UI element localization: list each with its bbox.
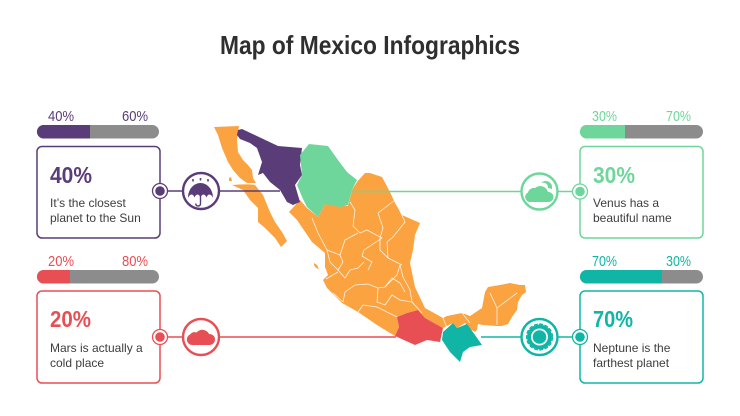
percent labels: 30% bbox=[592, 108, 617, 125]
connector line bbox=[481, 336, 573, 338]
connector dot bbox=[152, 330, 168, 344]
connector dot bbox=[572, 184, 588, 199]
description: Venus has a bbox=[593, 196, 659, 210]
percent labels: 20% bbox=[48, 253, 74, 270]
percent labels bbox=[592, 253, 691, 270]
percent labels bbox=[48, 253, 148, 270]
icon: gear bbox=[522, 319, 558, 355]
description: planet to the Sun bbox=[50, 211, 141, 225]
card bbox=[580, 291, 703, 383]
state borders bbox=[232, 184, 517, 328]
card bbox=[37, 146, 160, 238]
description: It’s the closest bbox=[50, 196, 126, 210]
region: Sonora bbox=[237, 129, 302, 205]
percent labels bbox=[592, 108, 691, 125]
region: Oaxaca bbox=[395, 310, 443, 345]
percent labels: 70% bbox=[592, 253, 617, 270]
panel: 70% teal bbox=[481, 253, 703, 383]
big number: 40% bbox=[50, 162, 92, 188]
progress bar bbox=[580, 125, 703, 138]
description: farthest planet bbox=[593, 356, 670, 370]
big number: 20% bbox=[50, 306, 91, 332]
description: Neptune is the bbox=[593, 341, 671, 355]
title: Map of Mexico Infographics bbox=[220, 30, 520, 60]
progress bar bbox=[37, 125, 159, 138]
icon: umbrella bbox=[183, 173, 219, 209]
connector dot bbox=[152, 184, 168, 198]
big number: 70% bbox=[593, 306, 633, 332]
progress bar bbox=[37, 270, 159, 284]
percent labels: 80% bbox=[122, 253, 148, 270]
panel: 20% red bbox=[37, 253, 396, 383]
panel: 40% purple bbox=[37, 108, 280, 238]
region: central and southern Mexico bbox=[289, 173, 526, 336]
percent labels: 60% bbox=[122, 108, 148, 125]
connector line bbox=[167, 336, 396, 338]
islands bbox=[229, 177, 319, 269]
connector dot bbox=[572, 330, 588, 344]
percent labels: 70% bbox=[666, 108, 691, 125]
percent labels bbox=[48, 108, 148, 125]
percent labels: 30% bbox=[666, 253, 691, 270]
region: Baja California Sur bbox=[232, 184, 287, 247]
card bbox=[580, 146, 703, 238]
big number: 30% bbox=[593, 162, 635, 188]
panel: 30% green bbox=[352, 108, 703, 238]
region: Chihuahua bbox=[297, 144, 357, 217]
percent labels: 40% bbox=[48, 108, 74, 125]
icon: cloud bbox=[183, 319, 219, 355]
progress bar bbox=[580, 270, 703, 284]
map of Mexico bbox=[214, 126, 526, 362]
region: Baja California bbox=[214, 126, 256, 183]
description: Mars is actually a bbox=[50, 341, 143, 355]
connector line bbox=[167, 190, 280, 192]
icon: cloud and sun bbox=[522, 174, 558, 210]
description: cold place bbox=[50, 356, 104, 370]
connector line bbox=[352, 190, 573, 192]
card bbox=[37, 291, 160, 383]
description: beautiful name bbox=[593, 211, 672, 225]
region: Chiapas bbox=[442, 323, 482, 362]
